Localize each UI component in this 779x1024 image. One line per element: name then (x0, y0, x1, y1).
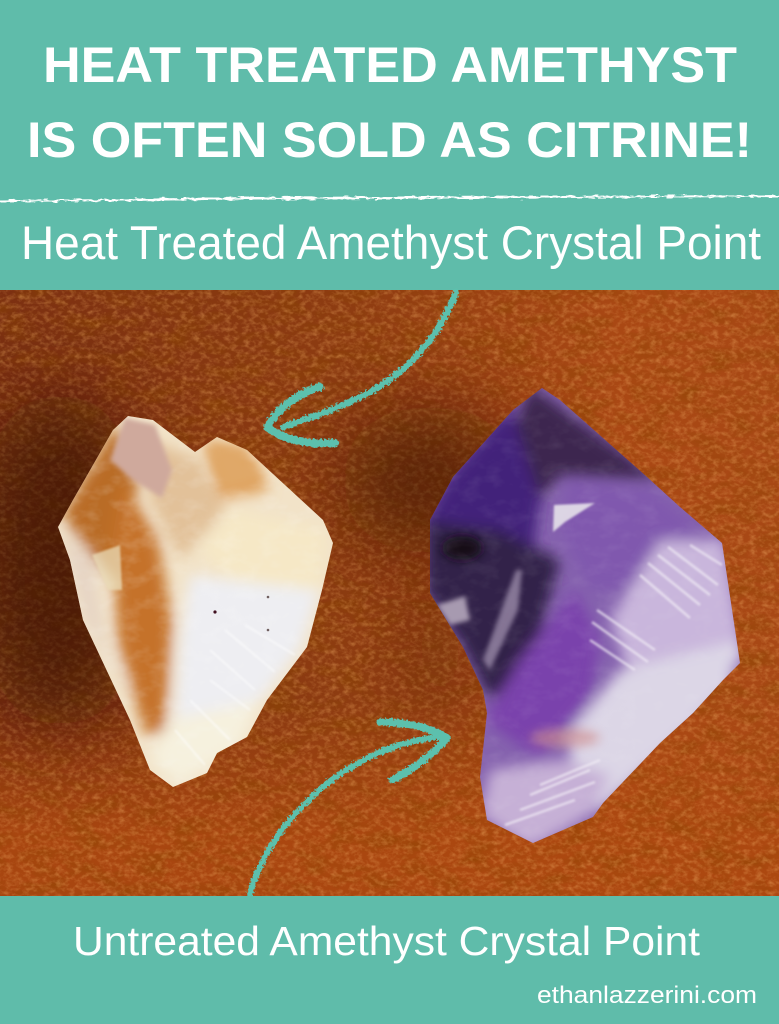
surface texture (430, 408, 652, 756)
title: IS OFTEN SOLD AS CITRINE! (27, 112, 752, 168)
arrow: pointing to heat treated crystal (267, 292, 456, 443)
arrow: pointing to untreated crystal (250, 722, 447, 894)
title: HEAT TREATED AMETHYST (43, 37, 737, 93)
reddish inclusions (530, 729, 600, 747)
dark core (442, 536, 482, 560)
website credit: ethanlazzerini.com (537, 982, 757, 1009)
wood background (0, 290, 779, 896)
citrine crystal (50, 410, 340, 795)
striated face highlights (505, 545, 722, 825)
bright facet (553, 503, 595, 532)
ridged face highlights (175, 653, 294, 765)
subtitle: heat treated amethyst crystal point: Heat Treated Amethyst Crystal Point (21, 216, 761, 269)
bottom teal banner (0, 896, 779, 1024)
torn paper divider (0, 195, 779, 202)
shadows beneath crystals (0, 390, 520, 730)
pink tip facet (110, 418, 172, 498)
top teal banner (0, 0, 779, 290)
caption: untreated amethyst crystal point: Untreated Amethyst Crystal Point (73, 918, 701, 964)
title (27, 37, 752, 168)
crystal surface texture (65, 452, 314, 724)
orange edge of right tip (205, 445, 260, 490)
amethyst crystal (425, 385, 745, 850)
photo: crystals on wood table (0, 290, 779, 896)
